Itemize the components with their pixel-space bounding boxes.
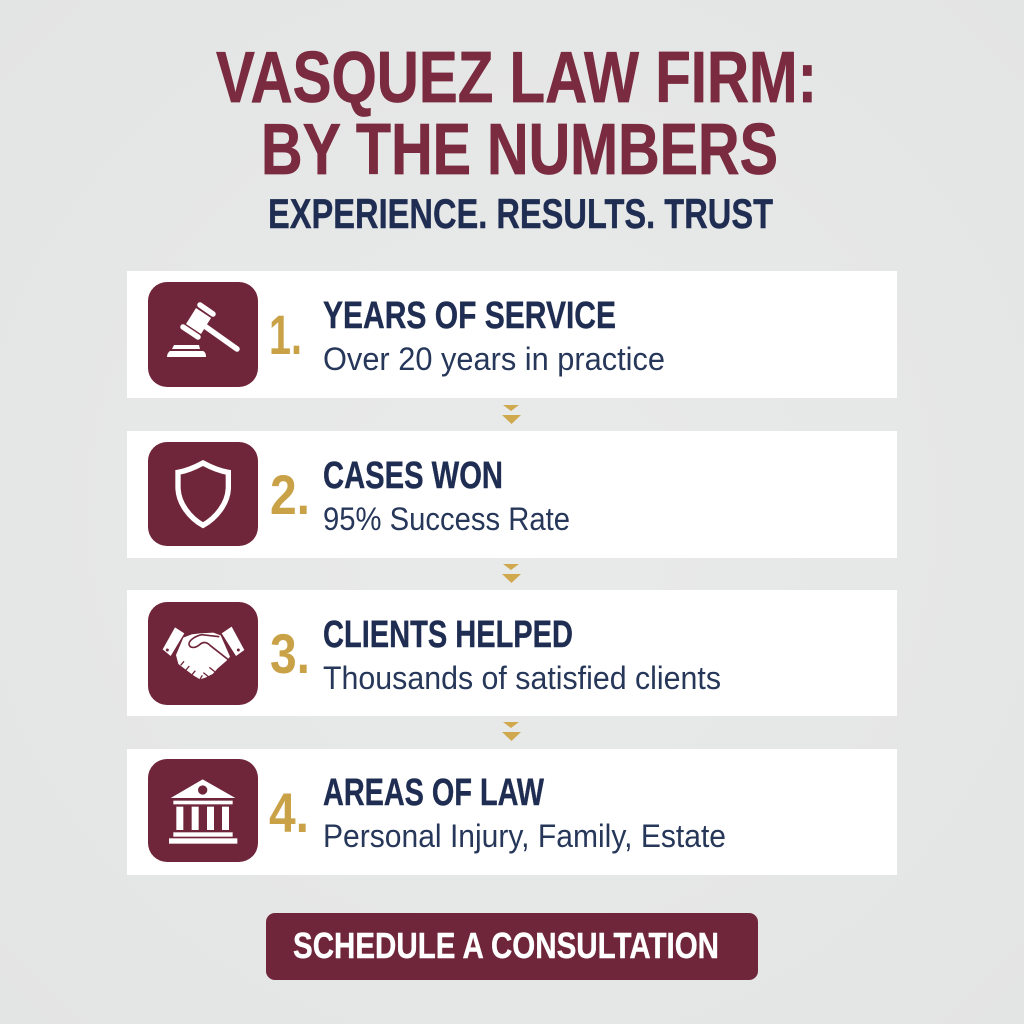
panel: areas of law [127, 749, 897, 875]
text: over 20 years: Over 20 years in practice [323, 341, 665, 377]
heading: cases won: CASES WON [323, 455, 503, 497]
panel: years of service [127, 271, 897, 398]
heading: years of service: YEARS OF SERVICE [323, 295, 616, 337]
text: practice areas: Personal Injury, Family, Estate [323, 818, 726, 854]
text: thousands of clients: Thousands of satisfied clients [323, 660, 721, 696]
panel: clients helped [127, 590, 897, 716]
heading: clients helped: CLIENTS HELPED [323, 614, 573, 656]
subtitle: EXPERIENCE. RESULTS. TRUST [268, 190, 773, 237]
icon: handshake [148, 602, 258, 705]
number 3: 3. [270, 622, 310, 685]
title: BY THE NUMBERS [261, 110, 778, 190]
panel: cases won [127, 431, 897, 558]
arrow 3 [502, 722, 521, 741]
arrow 1 [502, 405, 521, 424]
button: schedule a consultation [266, 913, 758, 980]
number 4: 4. [269, 781, 309, 844]
text: success rate: 95% Success Rate [323, 501, 570, 537]
heading: areas of law: AREAS OF LAW [323, 772, 544, 814]
button: schedule a consultation: SCHEDULE A CONSULTATION [293, 925, 719, 966]
number 1: 1. [269, 303, 302, 366]
icon: shield [148, 442, 258, 546]
icon: gavel [148, 282, 258, 387]
number 2: 2. [270, 463, 310, 526]
icon: courthouse [148, 759, 258, 862]
title: VASQUEZ LAW FIRM: [216, 38, 817, 118]
arrow 2 [502, 564, 521, 583]
title [216, 38, 817, 190]
